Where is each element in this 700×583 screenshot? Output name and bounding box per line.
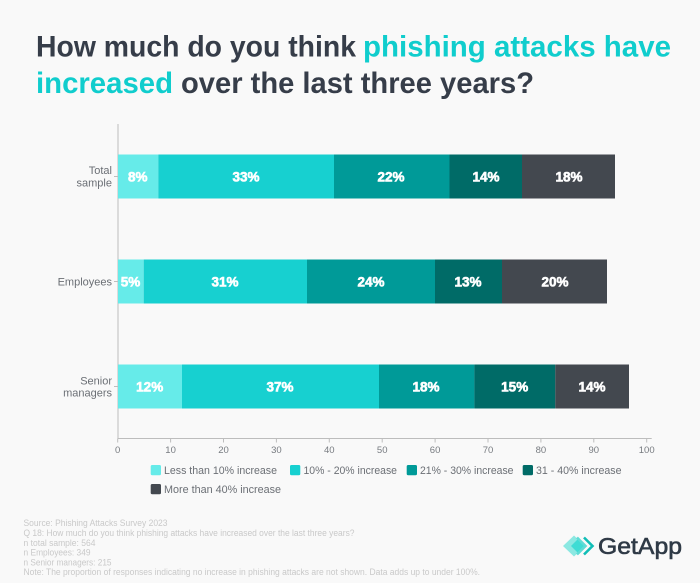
x axis tick labels: 10	[165, 445, 176, 456]
x axis tick labels: 90	[589, 445, 599, 456]
source notes: n Senior managers: 215	[24, 558, 112, 568]
GetApp logo: GetApp	[598, 533, 682, 559]
bar: senior managers	[118, 364, 629, 408]
x axis tick labels	[115, 445, 655, 456]
bar: senior managers: 15%	[501, 380, 528, 394]
bar: total sample: 33%	[232, 170, 260, 184]
bar: total sample: 14%	[472, 170, 500, 184]
bar: employees: 31%	[211, 274, 239, 290]
category labels: managers	[63, 388, 112, 400]
x axis tick labels: 100	[639, 445, 655, 456]
x axis tick labels: 50	[377, 445, 387, 456]
category labels: Total	[89, 165, 112, 177]
source notes	[24, 518, 480, 577]
x axis tick labels: 80	[536, 445, 546, 456]
x axis tick labels: 20	[218, 445, 229, 456]
bar: senior managers: 14%	[578, 380, 606, 394]
bar: total sample	[118, 154, 615, 198]
title: How much do you think	[36, 30, 357, 64]
icon: GetApp diamonds	[563, 536, 592, 556]
legend: More than 40% increase	[164, 484, 281, 496]
bar: senior managers: 37%	[266, 380, 294, 394]
category labels: Employees	[58, 277, 112, 289]
title: over the last three years?	[181, 67, 534, 100]
legend	[151, 465, 621, 496]
bar: total sample: 22%	[377, 170, 405, 184]
source notes: Source: Phishing Attacks Survey 2023	[24, 518, 168, 528]
title: phishing attacks have	[363, 30, 671, 64]
category labels: Senior	[80, 375, 112, 387]
category labels: sample	[77, 178, 112, 190]
legend: 21% - 30% increase	[420, 465, 514, 477]
bar: senior managers: 18%	[412, 380, 440, 394]
stacked bar chart	[58, 124, 655, 456]
bar: employees	[118, 260, 607, 304]
bar: total sample: 8%	[128, 170, 147, 184]
source notes: Note: The proportion of responses indicating no increase in phishing attacks are not shown. Data adds up to under 100%.	[24, 567, 480, 577]
x axis tick labels: 40	[324, 445, 335, 456]
x axis tick labels: 60	[430, 445, 440, 456]
bar: senior managers: 12%	[136, 380, 163, 394]
bar: employees: 24%	[357, 274, 385, 290]
title: increased	[36, 67, 173, 100]
title	[36, 30, 671, 100]
x axis tick labels: 0	[115, 445, 120, 456]
bar: employees: 5%	[121, 274, 140, 290]
legend: 31 - 40% increase	[536, 465, 622, 477]
bar: employees: 20%	[541, 274, 569, 290]
chart axes and ticks	[114, 124, 652, 442]
x axis tick labels: 30	[271, 445, 282, 456]
x axis tick labels: 70	[483, 445, 493, 456]
source notes: n Employees: 349	[24, 548, 90, 558]
source notes: Q 18: How much do you think phishing attacks have increased over the last three years?	[24, 528, 354, 538]
legend: Less than 10% increase	[164, 465, 277, 477]
bar: total sample: 18%	[555, 170, 583, 184]
bar: employees: 13%	[454, 274, 482, 290]
category labels	[58, 165, 112, 400]
GetApp logo	[563, 533, 682, 559]
source notes: n total sample: 564	[24, 538, 96, 548]
legend: 10% - 20% increase	[304, 465, 397, 477]
